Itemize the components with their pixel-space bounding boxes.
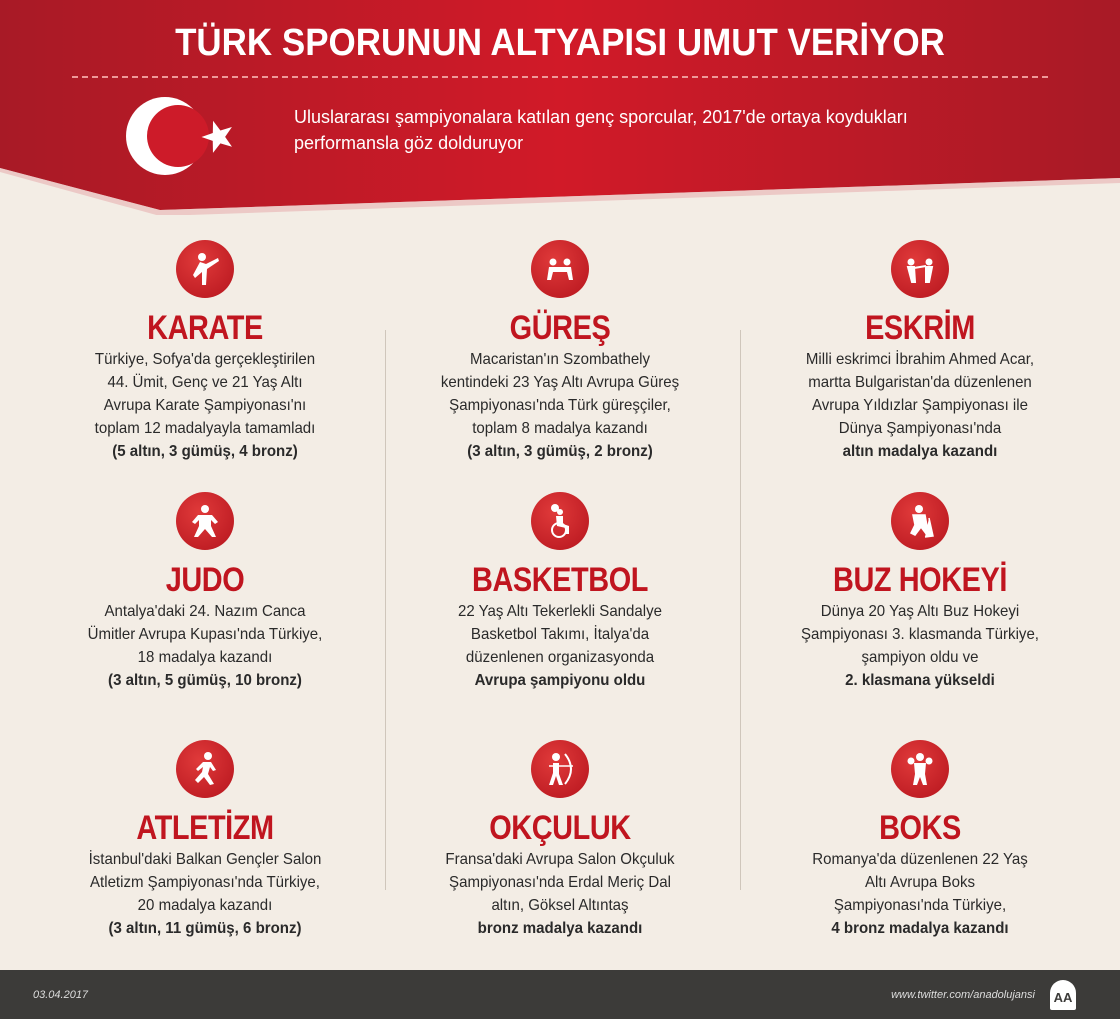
panel: atletizm bbox=[89, 740, 321, 937]
panel: judo: Ümitler Avrupa Kupası'nda Türkiye, bbox=[88, 626, 322, 643]
panel: atletizm: 20 madalya kazandı bbox=[138, 897, 272, 914]
panel: eskrim: martta Bulgaristan'da düzenlenen bbox=[808, 374, 1032, 391]
panel: karate: (5 altın, 3 gümüş, 4 bronz) bbox=[112, 443, 298, 460]
panel: boks: 4 bronz madalya kazandı bbox=[831, 920, 1009, 937]
panel: basketbol: düzenlenen organizasyonda bbox=[466, 649, 654, 666]
icon: AA logo bbox=[1050, 980, 1076, 1010]
panel: buz hokeyi bbox=[801, 492, 1039, 689]
panel: boks: BOKS bbox=[879, 809, 961, 847]
panel: basketbol: BASKETBOL bbox=[472, 561, 648, 599]
panel: buz hokeyi: BUZ HOKEYİ bbox=[833, 561, 1007, 599]
panel: judo: 18 madalya kazandı bbox=[138, 649, 272, 666]
title: TÜRK SPORUNUN ALTYAPISI UMUT VERİYOR bbox=[175, 22, 945, 64]
footer bbox=[0, 970, 1120, 1019]
panel: boks: Romanya'da düzenlenen 22 Yaş bbox=[812, 851, 1028, 868]
panel: eskrim bbox=[806, 240, 1034, 460]
panel: okculuk: Fransa'daki Avrupa Salon Okçuluk bbox=[445, 851, 675, 868]
panel: karate: Avrupa Karate Şampiyonası'nı bbox=[104, 397, 306, 414]
panel: buz hokeyi: Şampiyonası 3. klasmanda Türkiye, bbox=[801, 626, 1039, 643]
panel: okculuk bbox=[445, 740, 675, 937]
panel: gures: GÜREŞ bbox=[510, 309, 610, 347]
panel: basketbol bbox=[458, 492, 662, 689]
panel: eskrim: altın madalya kazandı bbox=[843, 443, 997, 460]
header banner bbox=[0, 0, 1120, 215]
panel: basketbol: 22 Yaş Altı Tekerlekli Sandalye bbox=[458, 603, 662, 620]
panel: eskrim: Avrupa Yıldızlar Şampiyonası ile bbox=[812, 397, 1028, 414]
panel: atletizm: (3 altın, 11 gümüş, 6 bronz) bbox=[108, 920, 302, 937]
panel: gures: Şampiyonası'nda Türk güreşçiler, bbox=[449, 397, 671, 414]
panel: buz hokeyi: 2. klasmana yükseldi bbox=[845, 672, 995, 689]
panel: eskrim: Dünya Şampiyonası'nda bbox=[839, 420, 1001, 437]
panel: eskrim: Milli eskrimci İbrahim Ahmed Acar, bbox=[806, 351, 1034, 368]
panel: gures: toplam 8 madalya kazandı bbox=[472, 420, 648, 437]
icon: turkish flag crescent and star bbox=[126, 97, 232, 175]
footer: 03.04.2017 bbox=[33, 989, 88, 1001]
panel: buz hokeyi: şampiyon oldu ve bbox=[861, 649, 979, 666]
panel: atletizm: İstanbul'daki Balkan Gençler Salon bbox=[89, 851, 321, 868]
panel: basketbol: Basketbol Takımı, İtalya'da bbox=[471, 626, 649, 643]
panel: atletizm: Atletizm Şampiyonası'nda Türkiye, bbox=[90, 874, 320, 891]
panel: gures bbox=[441, 240, 679, 460]
panel: gures: Macaristan'ın Szombathely bbox=[470, 351, 650, 368]
panel: judo: (3 altın, 5 gümüş, 10 bronz) bbox=[108, 672, 302, 689]
panel: okculuk: Şampiyonası'nda Erdal Meriç Dal bbox=[449, 874, 671, 891]
panel: gures: kentindeki 23 Yaş Altı Avrupa Güreş bbox=[441, 374, 679, 391]
panel: okculuk: bronz madalya kazandı bbox=[478, 920, 642, 937]
panel: boks bbox=[812, 740, 1028, 937]
panel: okculuk: altın, Göksel Altıntaş bbox=[491, 897, 629, 914]
panel: karate: 44. Ümit, Genç ve 21 Yaş Altı bbox=[107, 374, 303, 391]
panel: karate: Türkiye, Sofya'da gerçekleştirilen bbox=[95, 351, 315, 368]
panel: karate bbox=[94, 240, 315, 460]
panel: judo: Antalya'daki 24. Nazım Canca bbox=[104, 603, 305, 620]
panel: boks: Altı Avrupa Boks bbox=[865, 874, 975, 891]
panel: buz hokeyi: Dünya 20 Yaş Altı Buz Hokeyi bbox=[821, 603, 1019, 620]
panel: judo bbox=[88, 492, 322, 689]
panel: karate: toplam 12 madalyayla tamamladı bbox=[95, 420, 315, 437]
panel: okculuk: OKÇULUK bbox=[489, 809, 631, 847]
subtitle: Uluslararası şampiyonalara katılan genç sporcular, 2017'de ortaya koydukları performansla göz dolduruyor bbox=[294, 107, 908, 153]
panel: gures: (3 altın, 3 gümüş, 2 bronz) bbox=[467, 443, 653, 460]
panel: judo: JUDO bbox=[166, 561, 244, 599]
panel: karate: KARATE bbox=[147, 309, 263, 347]
panel: boks: Şampiyonası'nda Türkiye, bbox=[834, 897, 1006, 914]
icon: AA logo: AA bbox=[1054, 990, 1072, 1005]
panel: atletizm: ATLETİZM bbox=[136, 809, 274, 847]
panel: eskrim: ESKRİM bbox=[865, 309, 975, 347]
footer: www.twitter.com/anadolujansi bbox=[891, 989, 1035, 1001]
panel: basketbol: Avrupa şampiyonu oldu bbox=[475, 672, 645, 689]
